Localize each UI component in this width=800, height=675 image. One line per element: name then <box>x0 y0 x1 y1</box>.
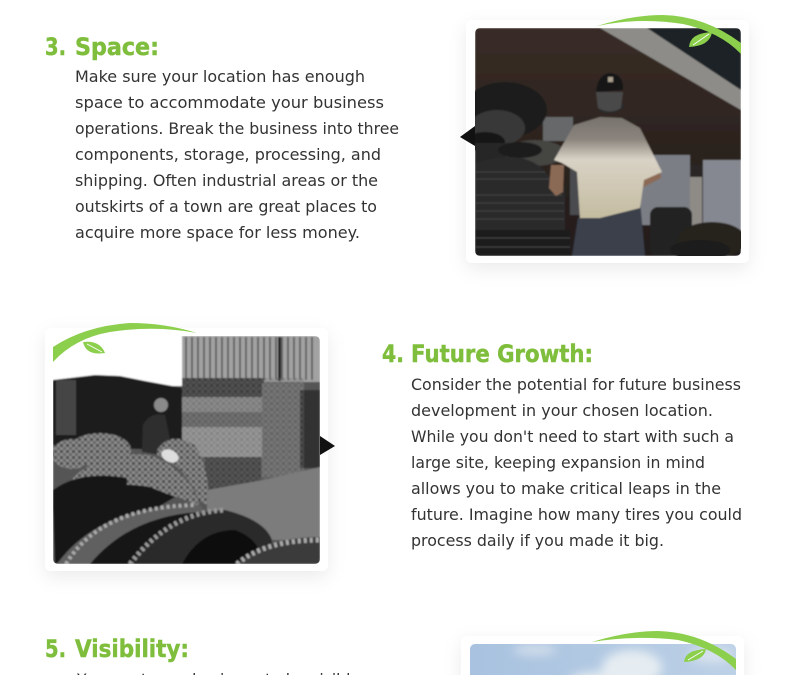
section 4: future growth <box>45 323 742 571</box>
green swoosh with leaf <box>53 323 197 362</box>
text block: space description <box>75 67 399 242</box>
heading: 4. Future Growth: Future Growth: <box>411 340 593 368</box>
photo card: man standing among tires <box>460 15 749 263</box>
text block: future growth description: process daily if you made it big. <box>411 531 664 550</box>
floor <box>207 467 320 540</box>
text block: space description: acquire more space for less money. <box>75 223 360 242</box>
heading: 4. Future Growth: 4. <box>382 340 404 368</box>
heading: 3. Space: 3. <box>45 33 66 61</box>
arrow pointer left <box>460 126 475 146</box>
heading: 3. Space: Space: <box>75 33 159 61</box>
walls <box>640 155 690 225</box>
dark stacked tires back <box>53 375 183 450</box>
photo card: sky <box>461 631 744 675</box>
man <box>572 200 645 256</box>
text block: space description: operations. Break the business into three <box>75 119 399 138</box>
right tires <box>649 206 693 228</box>
green swoosh with leaf <box>592 631 736 670</box>
heading: 5. Visibility: 5. <box>45 635 66 663</box>
text block: space description: outskirts of a town are great places to <box>75 197 377 216</box>
text block: future growth description: future. Imagine how many tires you could <box>411 505 742 524</box>
green swoosh with leaf <box>597 15 741 54</box>
section 5: visibility <box>45 631 744 675</box>
tire stack <box>475 82 547 134</box>
text block: space description: space to accommodate your business <box>75 93 384 112</box>
text block: space description: shipping. Often industrial areas or the <box>75 171 378 190</box>
text block: future growth description: large site, keeping expansion in mind <box>411 453 705 472</box>
tread stacks <box>182 378 264 397</box>
text block: future growth description: Consider the potential for future business <box>411 375 741 394</box>
text block: future growth description <box>411 375 742 550</box>
section 3: space <box>45 15 749 263</box>
text block: space description: components, storage, processing, and <box>75 145 381 164</box>
heading: 5. Visibility: Visibility: <box>75 635 189 663</box>
heading: 3. Space <box>45 33 159 61</box>
text block: space description: Make sure your location has enough <box>75 67 365 86</box>
worker <box>142 414 170 455</box>
text block: future growth description: development in your chosen location. <box>411 401 713 420</box>
tires front <box>69 433 131 467</box>
text block: future growth description: allows you to make critical leaps in the <box>411 479 721 498</box>
photo card: worker with stacked tires <box>45 323 335 571</box>
arrow pointer right <box>320 436 335 455</box>
text block: future growth description: While you don't need to start with such a <box>411 427 734 446</box>
